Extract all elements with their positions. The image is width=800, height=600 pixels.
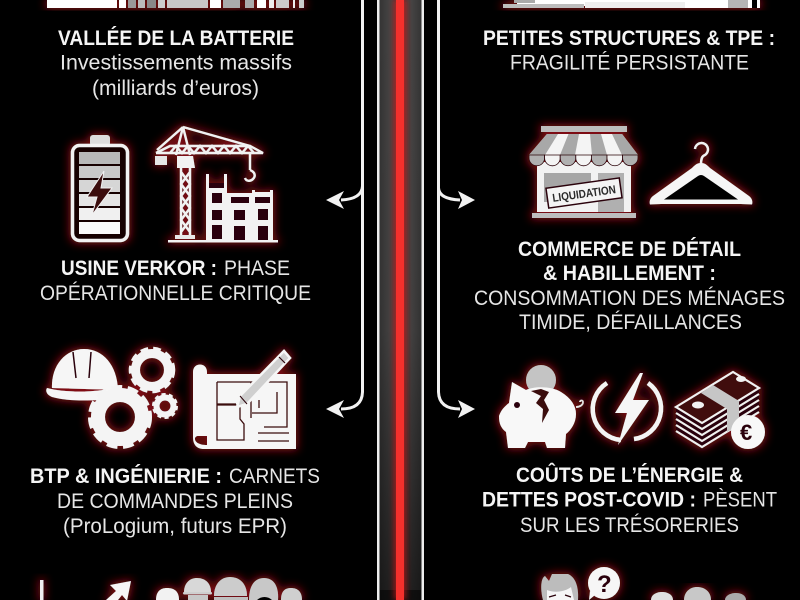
icon: helmet and gears bbox=[46, 349, 176, 446]
icon: shop front base, cropped at top right bbox=[503, 0, 760, 8]
text: BTP et ingenierie: (ProLogium, futurs EPR) bbox=[63, 515, 287, 538]
text: Couts de l'energie: COÛTS DE L’ÉNERGIE & bbox=[516, 463, 743, 487]
text: Vallee de la batterie bbox=[58, 27, 294, 100]
text: BTP et ingenierie: BTP & INGÉNIERIE : bbox=[30, 465, 222, 488]
central timeline band bbox=[377, 0, 424, 600]
text: Couts de l'energie: SUR LES TRÉSORERIES bbox=[520, 514, 739, 537]
text: Couts de l'energie: DETTES POST-COVID : bbox=[482, 488, 696, 512]
text: Commerce de detail bbox=[474, 238, 785, 334]
text: Couts de l'energie: PÈSENT bbox=[703, 488, 777, 512]
icon: cash stack and euro coin bbox=[676, 372, 765, 449]
icon: blueprint and pencil bbox=[193, 351, 296, 449]
text: BTP et ingenierie bbox=[30, 465, 320, 538]
text: Petites structures bbox=[483, 27, 775, 74]
icon: rising chart arrow, cropped at bottom bbox=[40, 580, 131, 600]
text: Usine Verkor: USINE VERKOR : bbox=[61, 257, 217, 280]
icon: group of workers in helmets, cropped at bottom bbox=[156, 577, 302, 600]
icon: battery bbox=[72, 135, 128, 240]
icon: energy bolt bbox=[593, 373, 661, 445]
text: Usine Verkor: OPÉRATIONNELLE CRITIQUE bbox=[40, 282, 311, 305]
icon: factory base, cropped at top left bbox=[47, 0, 304, 8]
text: Usine Verkor: PHASE bbox=[224, 257, 290, 280]
text: Vallee de la batterie: Investissements massifs bbox=[60, 52, 292, 74]
arrows: right branch bbox=[438, 0, 475, 418]
icon: worried man with question bubble, cropped at bottom bbox=[541, 567, 620, 600]
text: Vallee de la batterie: (milliards d’euros) bbox=[92, 77, 259, 100]
text: Usine Verkor bbox=[40, 257, 311, 305]
icon: crane and building bbox=[155, 127, 278, 242]
text: BTP et ingenierie: DE COMMANDES PLEINS bbox=[57, 490, 293, 513]
icon: cash stack and euro coin: € bbox=[740, 420, 752, 445]
text: Commerce de detail: CONSOMMATION DES MÉNAGES bbox=[474, 287, 785, 310]
text: Commerce de detail: & HABILLEMENT : bbox=[543, 262, 716, 285]
icon: broken piggy bank bbox=[499, 365, 583, 448]
icon: workers in helmets on the right, cropped at bottom bbox=[651, 587, 746, 600]
text: Commerce de detail: COMMERCE DE DÉTAIL bbox=[518, 238, 741, 261]
text: Petites structures: PETITES STRUCTURES & TPE : bbox=[483, 27, 775, 50]
icon: shop with liquidation sign bbox=[529, 126, 638, 218]
icon: worried man with question bubble, cropped at bottom: ? bbox=[597, 571, 612, 598]
text: Couts de l'energie bbox=[482, 463, 777, 537]
arrows: left branch bbox=[326, 0, 362, 418]
text: Petites structures: FRAGILITÉ PERSISTANTE bbox=[510, 52, 749, 74]
text: Vallee de la batterie: VALLÉE DE LA BATTERIE bbox=[58, 27, 294, 50]
icon: shop with liquidation sign: LIQUIDATION bbox=[552, 184, 617, 205]
icon: clothes hanger bbox=[650, 143, 752, 204]
text: Commerce de detail: TIMIDE, DÉFAILLANCES bbox=[519, 311, 742, 334]
text: BTP et ingenierie: CARNETS bbox=[229, 465, 320, 488]
